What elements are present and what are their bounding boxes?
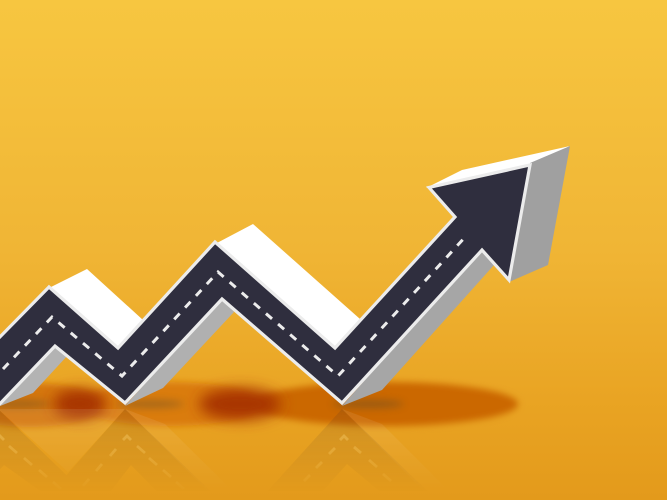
shadow: centre dark spot bbox=[199, 388, 281, 420]
arrow 3D body bbox=[0, 146, 570, 410]
reflection: road bands bbox=[0, 409, 399, 466]
grey side: left segment bbox=[0, 343, 68, 406]
ground shadows bbox=[0, 382, 518, 427]
contact shadow: centre base bbox=[116, 400, 184, 408]
shadow: middle ellipse bbox=[78, 382, 262, 426]
contact shadow: right base bbox=[332, 400, 404, 408]
white top face: arrow head bbox=[426, 146, 570, 188]
road surface with white edge bbox=[0, 165, 530, 410]
white top face: first peak bbox=[49, 269, 143, 352]
reflection: light side faces bbox=[0, 409, 413, 457]
contact shadow: left base bbox=[0, 400, 50, 408]
grey side: arrow head bbox=[509, 146, 570, 282]
grey side: shaft segment bbox=[342, 247, 494, 406]
shadow: right large ellipse bbox=[252, 382, 518, 426]
reflection: lane dashes bbox=[0, 434, 388, 478]
lane markings bbox=[3, 235, 467, 376]
road reflection on the ground bbox=[0, 409, 413, 478]
grey side: middle segment bbox=[125, 297, 234, 406]
shadow: left dark spot bbox=[53, 389, 107, 419]
white top face: second peak bbox=[215, 224, 360, 352]
shadow: left ellipse bbox=[0, 383, 102, 427]
